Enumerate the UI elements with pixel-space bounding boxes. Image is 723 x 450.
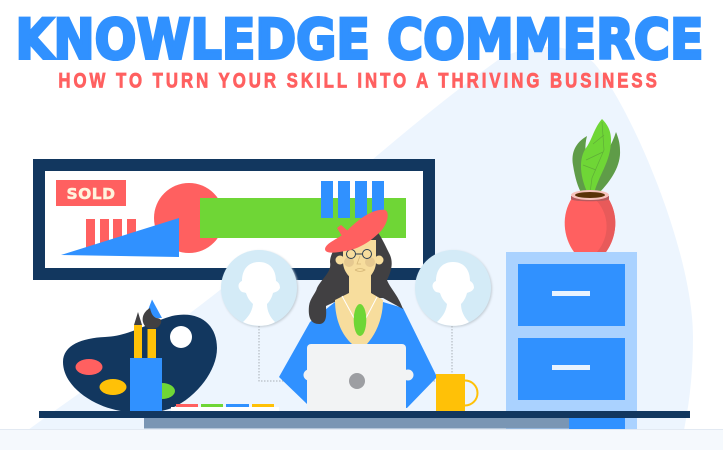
chest and neck [335,270,383,344]
colour swatches [171,404,279,412]
sold tag [56,180,126,206]
brush [143,300,162,359]
red circle [154,183,224,253]
background blob [28,47,693,430]
blue triangle [61,218,179,257]
hands [304,370,414,380]
filing cabinet [506,252,637,429]
pendant [354,304,366,336]
dotted connectors [259,326,452,381]
pencil [134,312,142,359]
glasses [346,250,372,258]
cheeks [344,257,375,267]
necklace [342,296,377,318]
ears [336,256,384,264]
sold tag: SOLD [66,185,116,203]
desk underside [144,418,569,428]
lips and nose [355,256,365,272]
desk top [39,411,690,418]
dress [279,302,437,408]
leaves [573,136,594,194]
laptop [307,344,406,412]
red bars [86,219,136,249]
palette [63,315,217,413]
plant [565,119,620,252]
blue bars [321,181,384,218]
beret [325,210,388,253]
green bar [200,198,406,238]
bottom strip [0,429,723,450]
wall picture [39,165,429,274]
subtitle: HOW TO TURN YOUR SKILL INTO A THRIVING BUSINESS [58,70,657,93]
hair [309,231,403,324]
cup [130,358,162,412]
person [279,210,437,408]
pot [565,198,615,252]
face [343,240,376,282]
right avatar [415,250,491,326]
left avatar [221,250,297,326]
mug [436,374,478,412]
